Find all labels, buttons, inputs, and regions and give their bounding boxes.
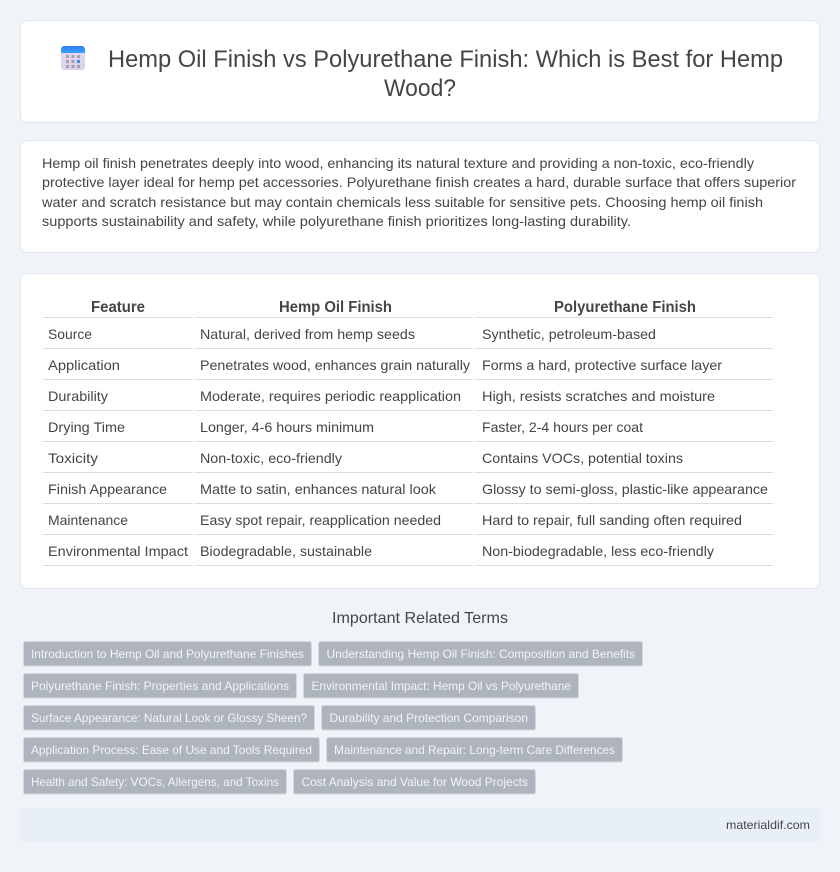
title xyxy=(108,46,783,102)
row: environmental impact xyxy=(48,543,714,559)
tag: Polyurethane Finish: Properties and Applications xyxy=(31,679,289,693)
tag: Application Process: Ease of Use and Tools Required xyxy=(31,743,312,757)
panel: comparison table xyxy=(20,274,820,588)
footer: materialdif.com xyxy=(726,818,810,832)
tag: Maintenance and Repair: Long-term Care Differences xyxy=(334,743,615,757)
footer xyxy=(20,808,820,842)
row: durability: Moderate, requires periodic reapplication xyxy=(200,388,461,404)
row: durability: High, resists scratches and moisture xyxy=(482,388,715,404)
row: maintenance xyxy=(48,512,742,528)
tag: Cost Analysis and Value for Wood Projects xyxy=(302,775,528,789)
row: source xyxy=(48,326,656,342)
tag xyxy=(24,738,320,762)
text block: introduction: Hemp oil finish penetrates deeply into wood, enhancing its natural texture and providing a non-toxic, eco-friendly xyxy=(42,155,754,171)
row: application: Application xyxy=(48,357,120,373)
heading: related terms: Important Related Terms xyxy=(332,610,508,627)
tag xyxy=(24,770,286,794)
row: environmental impact: Non-biodegradable, less eco-friendly xyxy=(482,543,714,559)
panel: related term tags xyxy=(24,642,642,794)
icon: calendar xyxy=(61,46,85,70)
tag xyxy=(318,642,642,666)
row: finish appearance: Matte to satin, enhances natural look xyxy=(200,481,437,497)
row: source: Natural, derived from hemp seeds xyxy=(200,326,415,342)
tag xyxy=(24,674,296,698)
row: drying time: Drying Time xyxy=(48,419,125,435)
row: source: Synthetic, petroleum-based xyxy=(482,326,656,342)
tag xyxy=(326,738,622,762)
tag: Environmental Impact: Hemp Oil vs Polyurethane xyxy=(312,679,571,693)
table header row: Hemp Oil Finish xyxy=(279,299,392,316)
title: Hemp Oil Finish vs Polyurethane Finish: Which is Best for Hemp xyxy=(108,46,783,73)
row: finish appearance: Glossy to semi-gloss, plastic-like appearance xyxy=(482,481,768,497)
row: toxicity: Non-toxic, eco-friendly xyxy=(200,450,342,466)
text block: introduction: supports sustainability and safety, while polyurethane finish prioritizes long-lasting durability. xyxy=(42,213,631,229)
table header row: Polyurethane Finish xyxy=(554,299,696,316)
row: drying time xyxy=(48,419,643,435)
row: finish appearance xyxy=(48,481,768,497)
row: toxicity: Contains VOCs, potential toxins xyxy=(482,450,683,466)
row: toxicity: Toxicity xyxy=(48,450,98,466)
text block: introduction: water and scratch resistance but may contain chemicals less suitable for sensitive pets. Choosing hemp oil finish xyxy=(41,194,763,210)
tag xyxy=(24,642,312,666)
row: application: Penetrates wood, enhances grain naturally xyxy=(200,357,470,373)
text block: introduction xyxy=(41,155,796,229)
row: drying time: Faster, 2-4 hours per coat xyxy=(482,419,643,435)
panel: header xyxy=(20,20,820,122)
row: finish appearance: Finish Appearance xyxy=(48,481,167,497)
tag xyxy=(322,706,536,730)
panel: intro text xyxy=(20,140,820,252)
tag xyxy=(24,706,314,730)
title: Wood? xyxy=(384,75,456,102)
row: environmental impact: Biodegradable, sustainable xyxy=(200,543,372,559)
row: maintenance: Maintenance xyxy=(48,512,128,528)
tag xyxy=(294,770,536,794)
row: toxicity xyxy=(48,450,683,466)
text block: introduction: protective layer ideal for hemp pet accessories. Polyurethane finish creates a hard, durable surface that offers superior xyxy=(42,174,796,190)
table header row: Feature xyxy=(91,299,145,316)
row: drying time: Longer, 4-6 hours minimum xyxy=(200,419,374,435)
row: environmental impact: Environmental Impact xyxy=(48,543,188,559)
tag: Health and Safety: VOCs, Allergens, and Toxins xyxy=(31,775,279,789)
tag xyxy=(304,674,578,698)
row: application xyxy=(48,357,722,373)
tag: Understanding Hemp Oil Finish: Composition and Benefits xyxy=(326,647,635,661)
row: application: Forms a hard, protective surface layer xyxy=(482,357,722,373)
row: durability: Durability xyxy=(48,388,108,404)
row: maintenance: Hard to repair, full sanding often required xyxy=(482,512,742,528)
row: source: Source xyxy=(48,326,92,342)
row: maintenance: Easy spot repair, reapplication needed xyxy=(200,512,441,528)
tag: Introduction to Hemp Oil and Polyurethane Finishes xyxy=(31,647,304,661)
table header row xyxy=(91,299,696,316)
tag: Surface Appearance: Natural Look or Glossy Sheen? xyxy=(31,711,307,725)
tag: Durability and Protection Comparison xyxy=(330,711,528,725)
row: durability xyxy=(48,388,715,404)
